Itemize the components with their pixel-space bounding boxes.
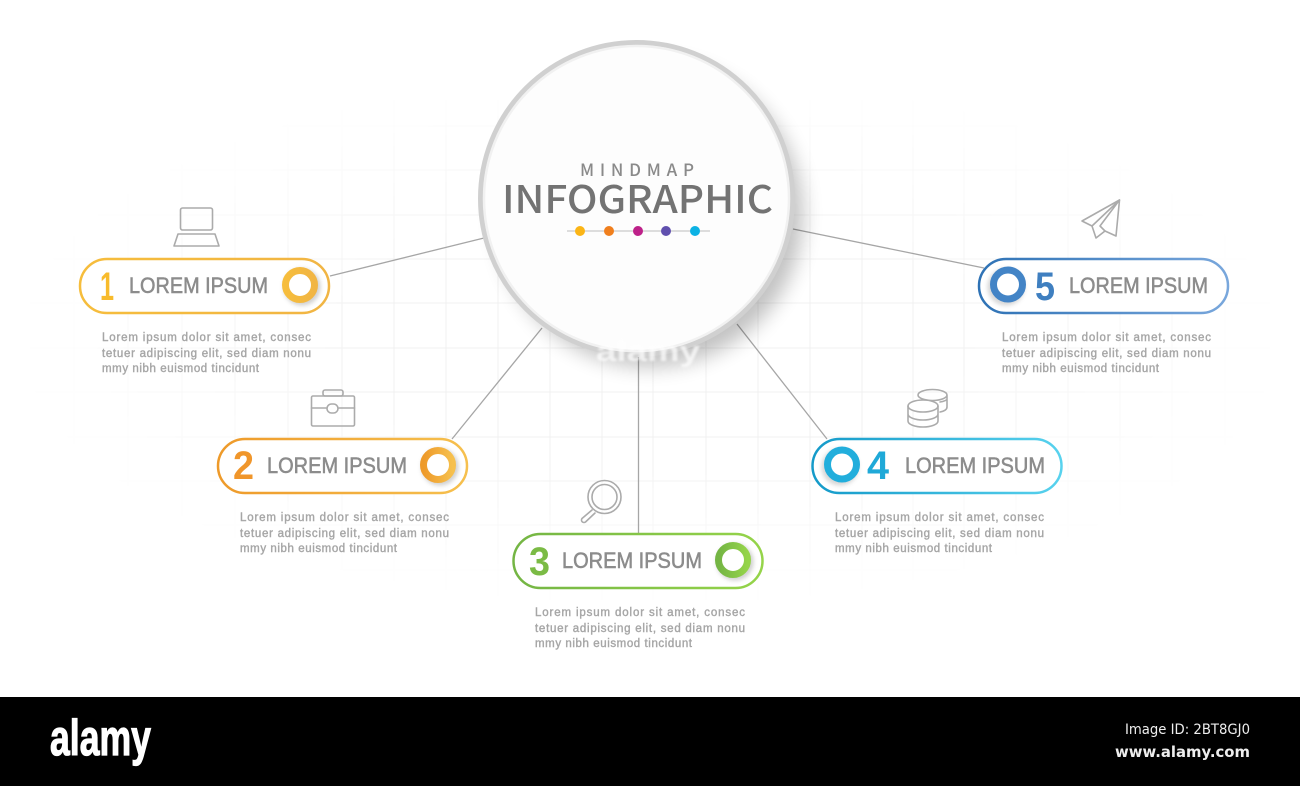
item 5 <box>979 200 1228 375</box>
label 1: LOREM IPSUM <box>129 273 268 298</box>
watermark fragment: alamy <box>596 336 700 368</box>
text 3: Lorem ipsum dolor sit amet, consec <box>535 607 745 619</box>
text 1: mmy nibh euismod tincidunt <box>102 363 260 375</box>
number 3: 3 <box>529 540 550 584</box>
number 4: 4 <box>867 444 890 488</box>
background grid <box>224 173 1076 520</box>
text 5 <box>1002 332 1211 375</box>
icon: laptop <box>174 208 219 246</box>
pill 4 <box>812 439 1062 493</box>
number 2: 2 <box>233 444 254 488</box>
colour dots <box>567 226 710 236</box>
text 1: Lorem ipsum dolor sit amet, consec <box>102 332 311 344</box>
text 5: mmy nibh euismod tincidunt <box>1002 363 1160 375</box>
ring 4 <box>825 450 856 482</box>
ring 1 <box>286 270 317 302</box>
text 4: mmy nibh euismod tincidunt <box>835 543 993 555</box>
text 2 <box>240 512 449 555</box>
text 1: tetuer adipiscing elit, sed diam nonu <box>102 348 311 360</box>
item 4 <box>812 389 1062 555</box>
icon: magnifier <box>582 480 621 522</box>
item 1 <box>80 208 329 375</box>
text 4: Lorem ipsum dolor sit amet, consec <box>835 512 1044 524</box>
central circle <box>480 42 803 367</box>
text 3: tetuer adipiscing elit, sed diam nonu <box>535 623 745 635</box>
text 2: tetuer adipiscing elit, sed diam nonu <box>240 528 449 540</box>
item 3 <box>514 480 762 650</box>
title: infographic: INFOGRAPHIC <box>502 169 773 224</box>
number 1: 1 <box>100 265 114 309</box>
text 2: mmy nibh euismod tincidunt <box>240 543 398 555</box>
text 4 <box>835 512 1044 555</box>
title: mindmap: MINDMAP <box>580 156 694 181</box>
text 3: mmy nibh euismod tincidunt <box>535 638 693 650</box>
pill 2 <box>218 439 467 493</box>
footer bar <box>0 697 1300 786</box>
text 3 <box>535 607 745 650</box>
website: www.alamy.com <box>1115 743 1250 761</box>
ring 5 <box>991 270 1022 302</box>
text 2: Lorem ipsum dolor sit amet, consec <box>240 512 449 524</box>
label 5: LOREM IPSUM <box>1069 273 1208 298</box>
label 2: LOREM IPSUM <box>267 453 407 478</box>
connector lines <box>330 229 984 533</box>
icon: briefcase <box>312 390 354 426</box>
pill 5 <box>979 259 1228 313</box>
image id: Image ID: 2BT8GJ0 <box>1125 722 1250 738</box>
label 4: LOREM IPSUM <box>905 453 1045 478</box>
icon: paper plane <box>1082 200 1120 238</box>
text 5: tetuer adipiscing elit, sed diam nonu <box>1002 348 1211 360</box>
ring 3 <box>718 546 750 577</box>
pill 1 <box>80 259 329 313</box>
pill 3 <box>514 534 762 588</box>
text 5: Lorem ipsum dolor sit amet, consec <box>1002 332 1211 344</box>
ring 2 <box>424 450 455 482</box>
icon: coins <box>908 389 947 427</box>
number 5: 5 <box>1035 265 1055 309</box>
text 4: tetuer adipiscing elit, sed diam nonu <box>835 528 1044 540</box>
item 2 <box>218 390 467 555</box>
alamy logo: alamy <box>50 710 151 766</box>
label 3: LOREM IPSUM <box>562 548 702 573</box>
text 1 <box>102 332 311 375</box>
